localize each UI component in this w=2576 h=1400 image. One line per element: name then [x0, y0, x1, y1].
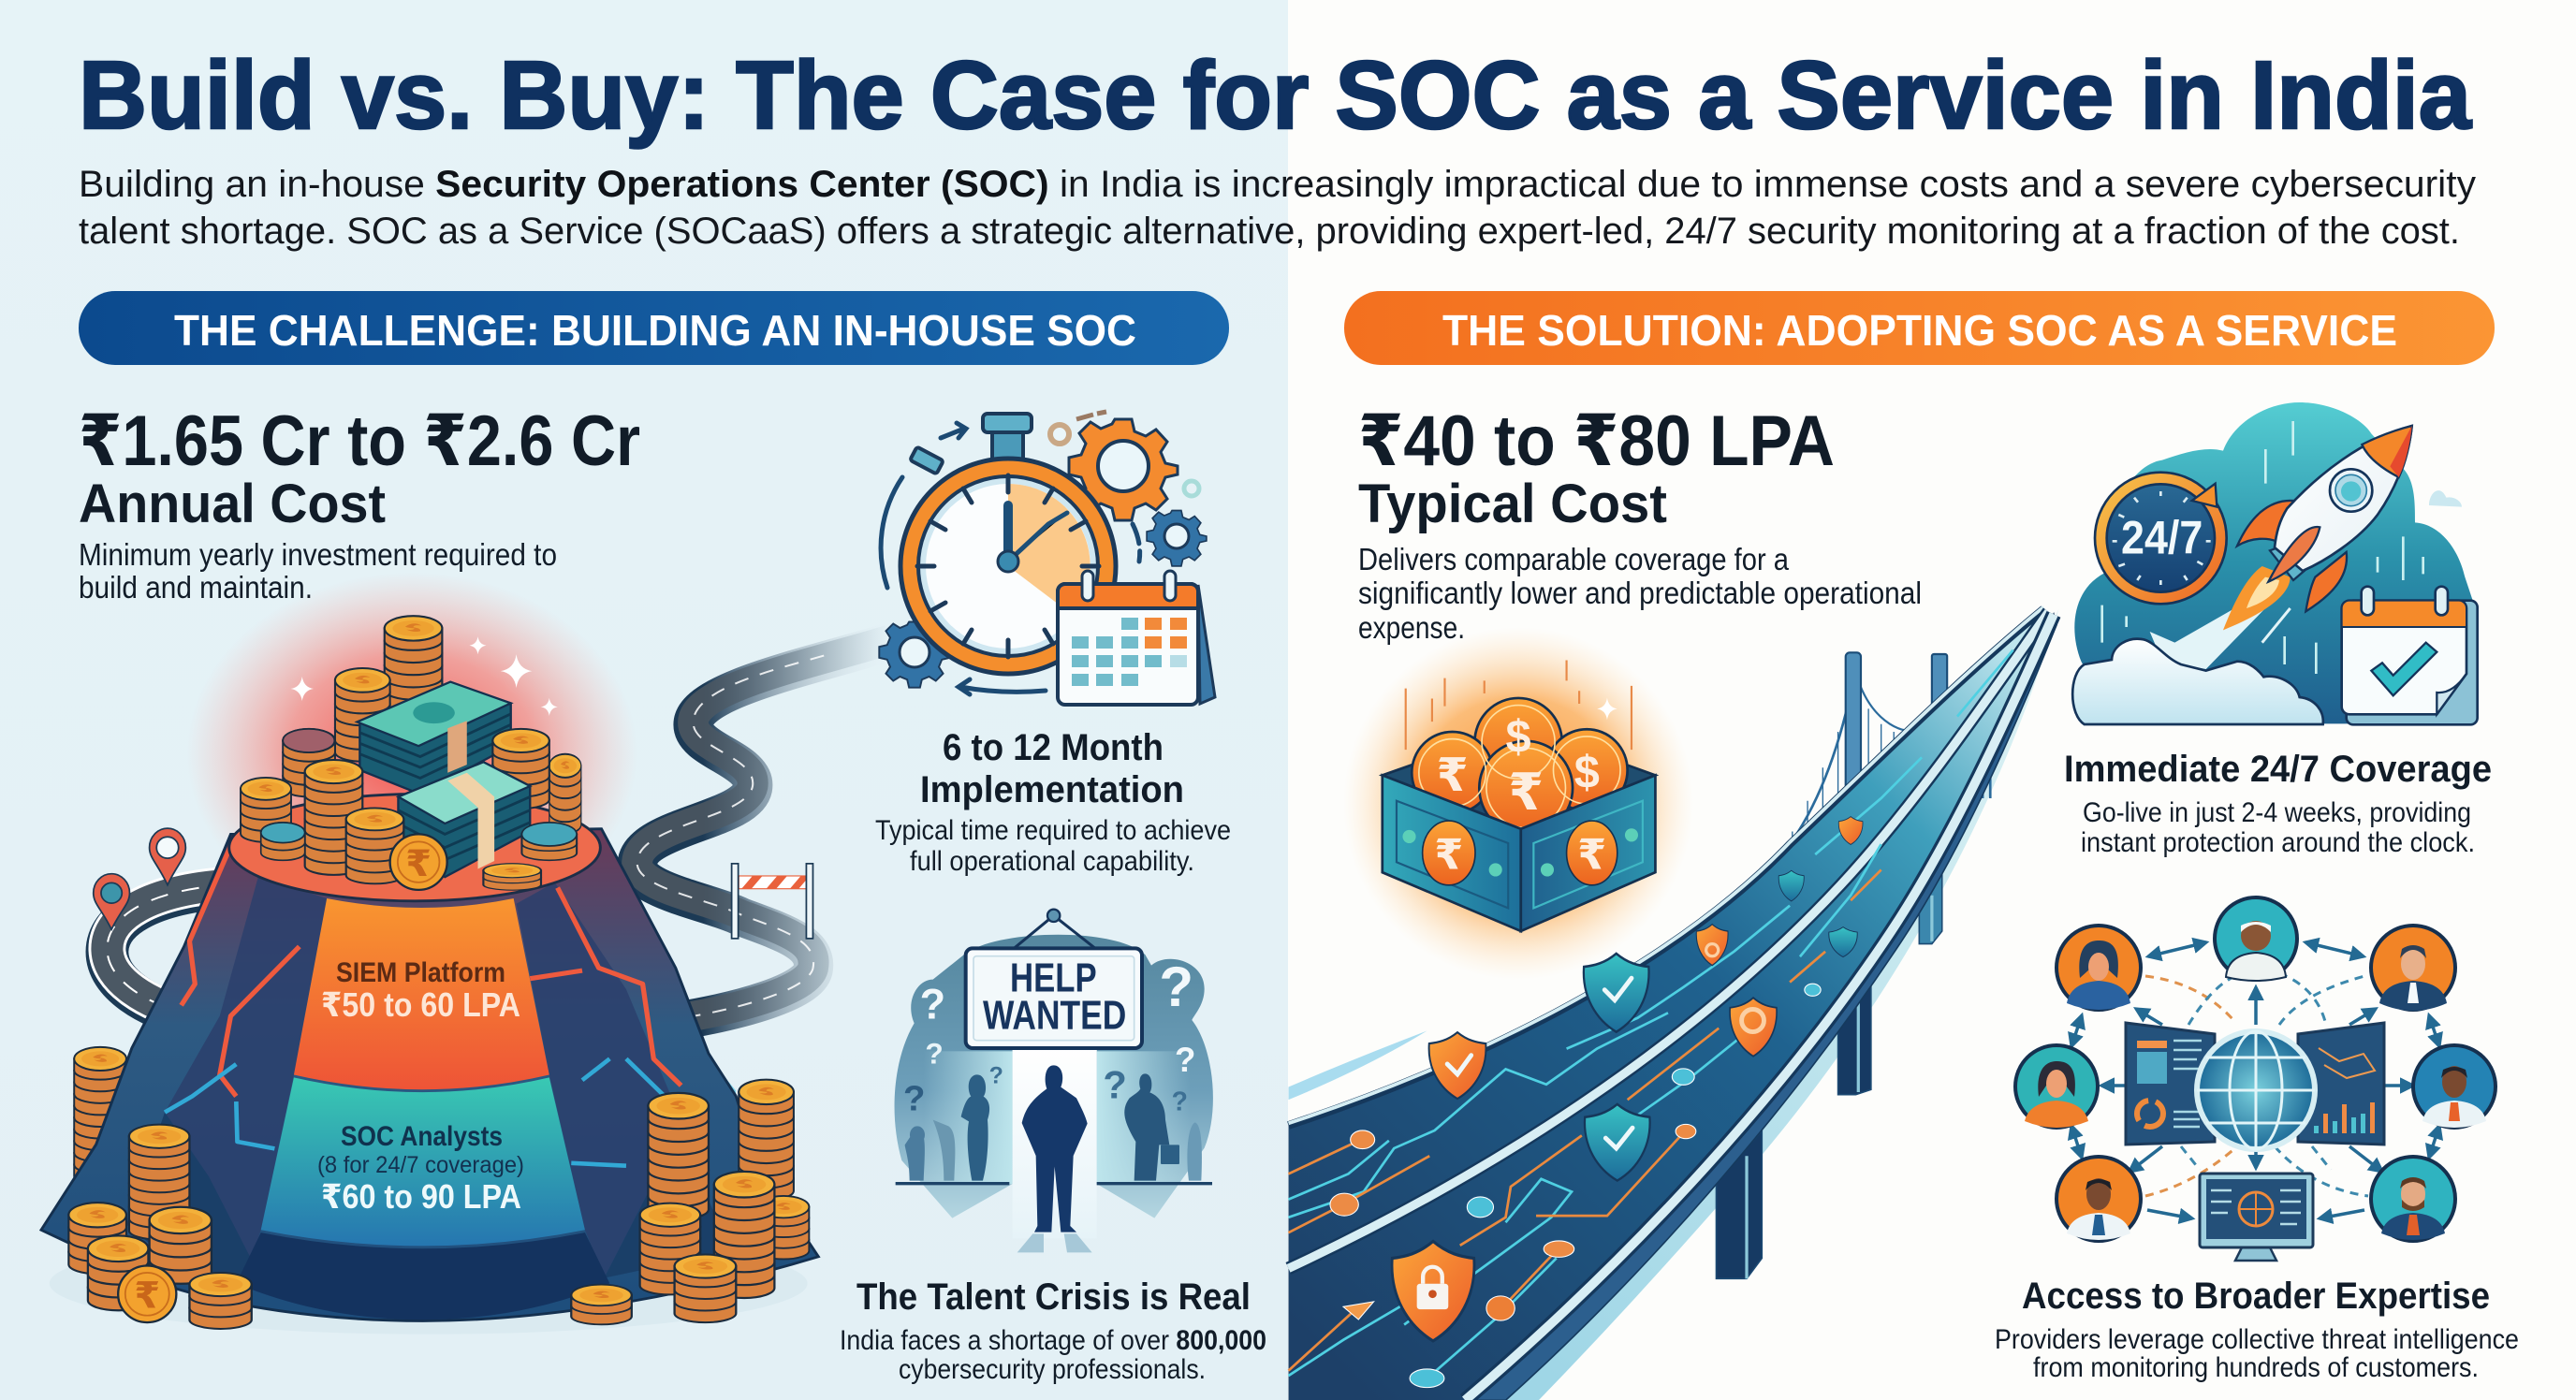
- bottom monitor: [2200, 1174, 2313, 1261]
- text: access to broader expertise: Access to Broader Expertise: [2022, 1276, 2490, 1317]
- calendar: [1198, 585, 1215, 704]
- typical cost block: expense.: [1358, 610, 1465, 645]
- hanging sign: [1014, 915, 1095, 948]
- text: 6 to 12 month implementation: Typical time required to achieve: [875, 815, 1231, 846]
- text: the talent crisis is real: cybersecurity professionals.: [899, 1354, 1206, 1385]
- text: immediate 24/7 coverage: Immediate 24/7 Coverage: [2064, 749, 2492, 790]
- inner lit panels: [924, 1051, 1013, 1184]
- shield checks and lock: [1447, 944, 1764, 1148]
- money box with rupee coins: ₹: [1508, 764, 1544, 821]
- railings and lane divider: [1289, 607, 2054, 1400]
- annual cost block: ₹1.65 Cr to ₹2.6 Cr: [79, 401, 640, 481]
- suspension towers and cables: [1760, 661, 1990, 936]
- top plateau: [229, 795, 600, 901]
- icon: rocket launch with 24/7 clock and calendar: 24/7: [2121, 512, 2203, 564]
- text: 6 to 12 month implementation: full operational capability.: [910, 846, 1194, 877]
- elapsed wedge: [1008, 484, 1090, 616]
- money box with rupee coins: ₹: [1577, 832, 1606, 878]
- person: lower right: [2371, 1157, 2455, 1241]
- red glow: [187, 572, 637, 936]
- center fin: [2268, 527, 2320, 582]
- annual cost block: build and maintain.: [79, 570, 313, 605]
- banner: the solution: [1344, 291, 2495, 365]
- text: 6 to 12 month implementation: [875, 727, 1231, 877]
- central figure: [1022, 1065, 1088, 1232]
- background: right solution side: [1288, 0, 2576, 1400]
- mountain label: SIEM platform cost: ₹50 to 60 LPA: [321, 985, 520, 1024]
- road barrier: [732, 864, 812, 939]
- road: left loop: [107, 884, 230, 1019]
- shields: [1392, 817, 1863, 1341]
- gear blue left: [879, 621, 950, 688]
- person: upper right: [2371, 926, 2455, 1011]
- blue cloud backdrop: [2074, 402, 2474, 723]
- annual cost block: [79, 401, 640, 605]
- money box with rupee coins: ₹: [1437, 751, 1469, 801]
- intro text: talent shortage. SOC as a Service (SOCaaS) offers a strategic alternative, providing expert-led, 24/7 security monitoring at a fraction of the cost.: [79, 211, 2460, 252]
- calendar with check: [2347, 601, 2478, 724]
- text: access to broader expertise: from monitoring hundreds of customers.: [2033, 1352, 2479, 1383]
- trace nodes: [1330, 984, 1821, 1388]
- text: immediate 24/7 coverage: Go-live in just 2-4 weeks, providing: [2083, 797, 2471, 828]
- illustration: digital bridge highway with shields: [1289, 607, 2058, 1400]
- data traces cyan: [1289, 650, 2013, 1381]
- mountain label: SIEM platform cost: SIEM Platform: [336, 957, 505, 988]
- wall screens: [2126, 1023, 2384, 1145]
- text: the talent crisis is real: India faces a shortage of over 800,000: [840, 1325, 1266, 1356]
- illustration: cost mountain with coins and roads: [41, 572, 890, 1334]
- foreground coin stacks right: [571, 1080, 809, 1324]
- 24/7 clock: [2100, 478, 2220, 598]
- watch body: [900, 459, 1116, 674]
- sparkles: [290, 636, 558, 716]
- text: immediate 24/7 coverage: instant protection around the clock.: [2081, 827, 2475, 858]
- banner: the challenge: THE CHALLENGE: BUILDING AN IN-HOUSE SOC: [174, 306, 1136, 355]
- gear orange: [1069, 419, 1178, 520]
- intro text: [79, 164, 2476, 252]
- question marks: ?: [1172, 1087, 1188, 1117]
- connection arrows: [2071, 942, 2439, 1158]
- question marks: ?: [920, 980, 945, 1028]
- foreground coin stacks left: ₹: [134, 1276, 160, 1317]
- data streaks: [2102, 421, 2423, 674]
- icon: expert network around globe: [2015, 897, 2496, 1261]
- icon: stopwatch with gears and calendar: [879, 412, 1215, 705]
- rock facets: [126, 877, 730, 1278]
- small cloud: [2429, 490, 2462, 507]
- gear blue small: [1147, 511, 1207, 566]
- data traces orange: [1289, 869, 1881, 1371]
- crown: [992, 430, 1023, 460]
- hands: [1003, 505, 1013, 561]
- question marks: ?: [925, 1037, 944, 1071]
- text: 6 to 12 month implementation: 6 to 12 Month: [943, 727, 1164, 768]
- coin stacks behind mountain: [74, 1047, 736, 1186]
- title: Build vs. Buy: The Case for SOC as a Service in India: [79, 41, 2472, 149]
- mountain label: SOC analysts cost: ₹60 to 90 LPA: [321, 1177, 521, 1216]
- flame: [2223, 566, 2291, 630]
- person: middle left: [2015, 1045, 2098, 1128]
- rocket body: [2275, 426, 2412, 571]
- annual cost block: Annual Cost: [79, 474, 386, 534]
- ring and dashes: [1050, 425, 1069, 444]
- silhouettes background: [905, 1073, 1202, 1181]
- person: upper left: [2056, 926, 2141, 1010]
- money box with rupee coins: $: [1506, 712, 1531, 763]
- dark base band: [236, 1232, 609, 1320]
- orange band: SIEM: [294, 898, 549, 1089]
- fins: [2237, 501, 2293, 546]
- annual cost block: Minimum yearly investment required to: [79, 537, 557, 572]
- ground shadow: [50, 1232, 808, 1334]
- teal band: analysts: [261, 1077, 585, 1246]
- motion arcs: [881, 423, 1140, 694]
- doorway: [1013, 1045, 1097, 1238]
- question marks: ?: [1103, 1062, 1127, 1106]
- road: right winding path into distance: [637, 639, 890, 1021]
- intro text: Building an in-house Security Operations Center (SOC) in India is increasingly impractical due to immense costs and a severe cybersecurity: [79, 164, 2476, 205]
- text: immediate 24/7 coverage: [2064, 749, 2492, 858]
- typical cost block: significantly lower and predictable operational: [1358, 576, 1922, 610]
- mountain label: SOC analysts cost: (8 for 24/7 coverage): [317, 1152, 524, 1178]
- map pins: [94, 828, 185, 929]
- text: the talent crisis is real: The Talent Crisis is Real: [856, 1276, 1251, 1318]
- icon: help wanted talent crisis: WANTED: [983, 992, 1126, 1038]
- contrail: [2150, 605, 2268, 669]
- falling coin streaks: [1406, 661, 1632, 750]
- typical cost block: Delivers comparable coverage for a: [1358, 542, 1790, 576]
- mountain label: SIEM platform cost: [321, 957, 520, 1024]
- mountain label: SOC analysts cost: SOC Analysts: [341, 1121, 503, 1152]
- deck: [1289, 609, 2054, 1400]
- person: middle right: [2413, 1045, 2496, 1128]
- tail ring: [2270, 546, 2305, 580]
- person: lower left: [2056, 1157, 2141, 1241]
- screen widgets: [2137, 1041, 2375, 1133]
- person: top: [2215, 897, 2297, 981]
- text: the talent crisis is real: [840, 1276, 1266, 1385]
- icon: rocket launch with 24/7 clock and calendar: [2072, 402, 2478, 724]
- typical cost block: [1358, 401, 1922, 645]
- question marks: ?: [903, 1079, 925, 1119]
- coins: [1412, 698, 1628, 835]
- ticks: [917, 475, 1099, 657]
- money box with rupee coins: [1383, 698, 1655, 931]
- cash bundle rear: [359, 683, 511, 795]
- nose cone: [2362, 426, 2412, 477]
- cash bundle front: [398, 762, 530, 877]
- banner: the solution: THE SOLUTION: ADOPTING SOC AS A SERVICE: [1442, 306, 2397, 355]
- floor line: [896, 1179, 1212, 1189]
- white cloud: [2072, 639, 2323, 724]
- dashed links: [2145, 973, 2368, 1196]
- text: access to broader expertise: [1995, 1276, 2519, 1383]
- box faces: [1383, 775, 1521, 931]
- money box with rupee coins: $: [1574, 748, 1600, 798]
- text: access to broader expertise: Providers leverage collective threat intelligence: [1995, 1324, 2519, 1355]
- text: 6 to 12 month implementation: Implementation: [920, 769, 1184, 810]
- question marks: ?: [1159, 955, 1193, 1018]
- question marks: ?: [1175, 1041, 1195, 1079]
- underside sky wedge: [1465, 609, 2058, 1400]
- window: [2330, 469, 2372, 512]
- pillars: [1716, 865, 1942, 1278]
- money box with rupee coins: ₹: [1434, 832, 1463, 878]
- money box glow: [1343, 627, 1693, 980]
- mountain label: SOC analysts cost: [317, 1121, 524, 1216]
- icon: help wanted talent crisis: HELP: [1010, 955, 1097, 1000]
- question marks: ?: [989, 1062, 1003, 1088]
- speed wisp: [1289, 1030, 1427, 1100]
- typical cost block: Typical Cost: [1358, 474, 1667, 534]
- foreground coin stacks left: [68, 1125, 252, 1329]
- background: left challenge side: [0, 0, 1288, 1400]
- figure reflection: [1017, 1233, 1092, 1252]
- coin and cash pile: [241, 616, 581, 890]
- banner: the challenge: [79, 291, 1229, 365]
- mountain rock: [41, 829, 818, 1320]
- typical cost block: ₹40 to ₹80 LPA: [1358, 401, 1835, 481]
- coin and cash pile: ₹: [405, 843, 432, 884]
- globe: [2197, 1031, 2315, 1149]
- deck side: [1465, 614, 2056, 1400]
- rock cracks: [165, 839, 681, 1166]
- icon: help wanted talent crisis: [895, 910, 1213, 1252]
- backdrop: [895, 935, 1213, 1218]
- question marks: [903, 955, 1195, 1119]
